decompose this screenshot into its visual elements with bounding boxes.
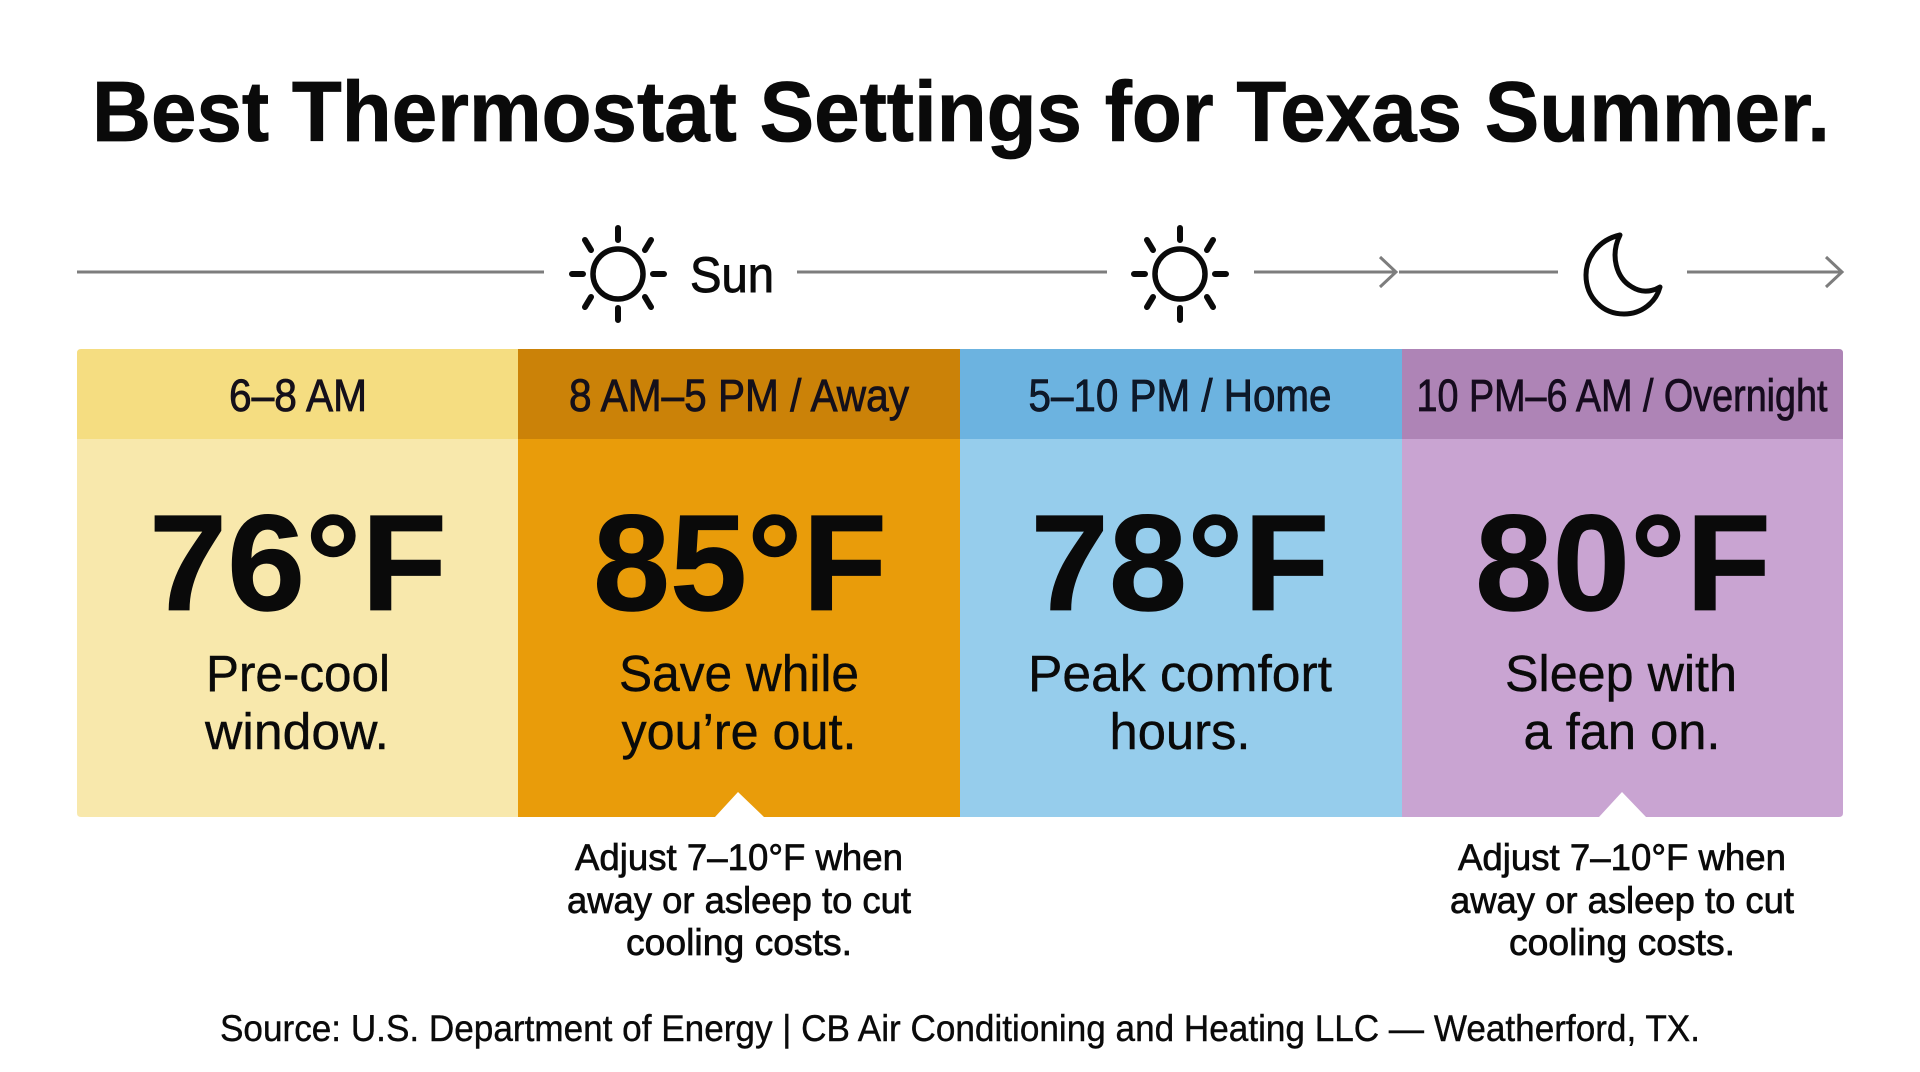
temperature: 78°F [1030, 487, 1330, 640]
panel header [1402, 349, 1843, 439]
panel: 6-8 AM [77, 349, 518, 817]
callout: away note [567, 837, 912, 963]
temperature: 85°F [593, 487, 887, 640]
icon: moon [1586, 235, 1660, 314]
callout: overnight note: cooling costs. [1509, 922, 1735, 963]
description: Pre-cool [206, 645, 390, 702]
panel body [960, 439, 1402, 817]
icon: sun evening [1134, 228, 1226, 320]
panel body [1402, 439, 1843, 817]
temperature: 80°F [1475, 487, 1771, 640]
time label: 8 AM–5 PM / Away [569, 370, 909, 421]
time label: 6–8 AM [229, 370, 367, 421]
label: Sun: Sun [690, 247, 774, 303]
title: Best Thermostat Settings for Texas Summer. [92, 65, 1830, 160]
timeline [77, 228, 1842, 320]
panel header [518, 349, 960, 439]
description: you’re out. [622, 703, 856, 760]
description: Save while [619, 645, 859, 702]
arrow: evening [1254, 257, 1396, 287]
panel header [960, 349, 1402, 439]
temperature: 76°F [149, 487, 447, 640]
time label: 10 PM–6 AM / Overnight [1416, 370, 1828, 421]
panel: 5-10 PM home [960, 349, 1402, 817]
arrow: overnight [1687, 257, 1842, 287]
callout: away note: cooling costs. [626, 922, 852, 963]
callout: overnight note: Adjust 7–10°F when [1458, 837, 1786, 878]
description: hours. [1110, 703, 1250, 760]
callout: overnight note [1450, 837, 1795, 963]
description [1028, 645, 1332, 760]
timeline segment: midday [797, 270, 1107, 274]
description: Peak comfort [1028, 645, 1332, 702]
panel body [518, 439, 960, 817]
icon: sun morning [572, 228, 664, 320]
description [619, 645, 859, 760]
description [204, 645, 390, 760]
callout: overnight note: away or asleep to cut [1450, 880, 1795, 921]
panel: 8 AM-5 PM away [518, 349, 960, 817]
callout: away note: Adjust 7–10°F when [575, 837, 903, 878]
panel body [77, 439, 518, 817]
timeline segment: start [77, 270, 544, 274]
description: window. [204, 703, 389, 760]
source line: Source: U.S. Department of Energy | CB Air Conditioning and Heating LLC — Weatherford, TX. [220, 1008, 1700, 1049]
description: a fan on. [1524, 703, 1720, 760]
time label: 5–10 PM / Home [1028, 370, 1332, 421]
callout: away note: away or asleep to cut [567, 880, 912, 921]
timeline segment: late evening [1399, 270, 1558, 274]
description: Sleep with [1505, 645, 1737, 702]
panel: 10 PM-6 AM overnight [1402, 349, 1843, 817]
description [1505, 645, 1737, 760]
panel header [77, 349, 518, 439]
